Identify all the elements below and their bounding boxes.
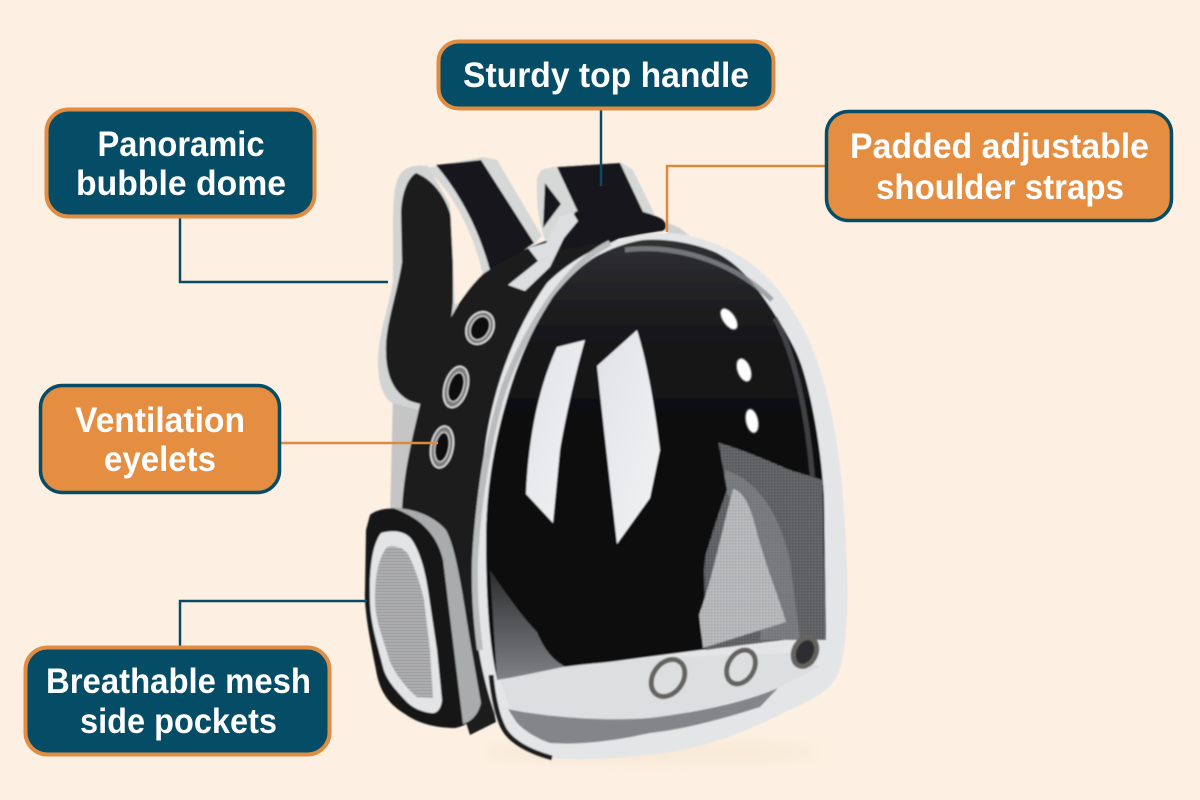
side pocket	[365, 508, 481, 728]
label: sturdy top handle: Sturdy top handle	[463, 56, 749, 95]
label: padded adjustable shoulder straps: shoulder straps	[876, 168, 1124, 207]
label: ventilation eyelets: eyelets	[104, 440, 216, 479]
dome reflection right	[597, 330, 660, 544]
connector: padded shoulder straps	[667, 166, 826, 232]
dome reflection left	[526, 340, 585, 523]
dome vent holes	[717, 306, 760, 434]
pocket mesh	[375, 546, 433, 698]
central padded black shape	[530, 440, 727, 664]
connector: breathable mesh pockets	[180, 601, 367, 646]
side body panel	[402, 236, 620, 735]
connector: ventilation eyelets	[281, 442, 438, 444]
dome base pad	[500, 653, 820, 721]
connector: panoramic bubble dome	[180, 218, 388, 282]
label: breathable mesh side pockets: Breathable mesh	[46, 662, 311, 701]
left shoulder strap loop	[378, 166, 484, 410]
label: panoramic bubble dome: Panoramic	[98, 125, 264, 164]
rear strap band	[537, 163, 692, 240]
label: ventilation eyelets: Ventilation	[75, 401, 245, 440]
base eyelets	[644, 634, 821, 703]
dome rim highlight	[625, 249, 772, 300]
label: ventilation eyelets	[40, 386, 280, 492]
mesh window inside dome	[699, 442, 826, 650]
ground shadow	[480, 744, 820, 760]
side eyelets	[428, 307, 499, 470]
top handle	[558, 207, 666, 250]
label: sturdy top handle	[438, 42, 774, 108]
front strap band	[426, 157, 542, 280]
grey reflection at dome base	[490, 570, 568, 680]
backpack illustration	[365, 157, 848, 760]
label: breathable mesh side pockets	[26, 648, 330, 754]
label: padded adjustable shoulder straps: Padded adjustable	[850, 127, 1149, 166]
label: panoramic bubble dome: bubble dome	[76, 164, 286, 203]
label: panoramic bubble dome	[46, 110, 314, 216]
dome shell	[472, 233, 848, 759]
label: breathable mesh side pockets: side pockets	[80, 702, 277, 741]
dome base shadow	[508, 688, 778, 744]
dark interior edge band	[775, 318, 814, 500]
dome dark interior	[486, 240, 826, 678]
back mesh panel	[390, 395, 420, 520]
strap buckle	[508, 213, 578, 291]
label: padded adjustable shoulder straps	[826, 112, 1172, 220]
connector: sturdy top handle	[600, 110, 602, 186]
